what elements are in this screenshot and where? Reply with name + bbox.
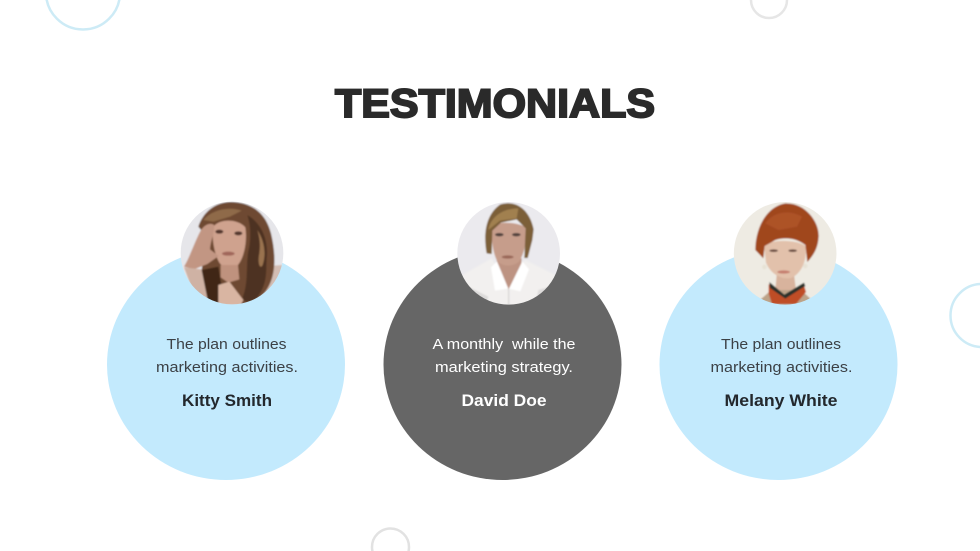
portrait: David Doe [455, 200, 563, 307]
quote: Melany White: The plan outlines [721, 336, 841, 353]
circle background: Melany White [660, 249, 898, 480]
panel: Kitty Smith testimonial [107, 200, 345, 480]
panel: David Doe testimonial [384, 200, 622, 480]
name: David Doe: David Doe [462, 391, 546, 410]
quote: Melany White: marketing activities. [710, 359, 852, 376]
name: Melany White: Melany White [724, 391, 838, 410]
quote: Kitty Smith: The plan outlines [166, 336, 286, 353]
quote: David Doe: A monthly while the [432, 336, 576, 353]
panel: Melany White testimonial [660, 200, 898, 480]
quote: Kitty Smith: marketing activities. [156, 359, 298, 376]
name: Kitty Smith: Kitty Smith [182, 391, 272, 410]
quote: David Doe: marketing strategy. [435, 359, 573, 376]
portrait: Kitty Smith [180, 200, 287, 307]
circle background: David Doe [384, 249, 622, 480]
circle background: Kitty Smith [107, 249, 345, 480]
quote: Melany White [710, 336, 852, 376]
quote: Kitty Smith [156, 336, 298, 376]
title: TESTIMONIALS [335, 82, 655, 126]
portrait: Melany White [732, 200, 840, 307]
quote: David Doe [432, 336, 576, 376]
